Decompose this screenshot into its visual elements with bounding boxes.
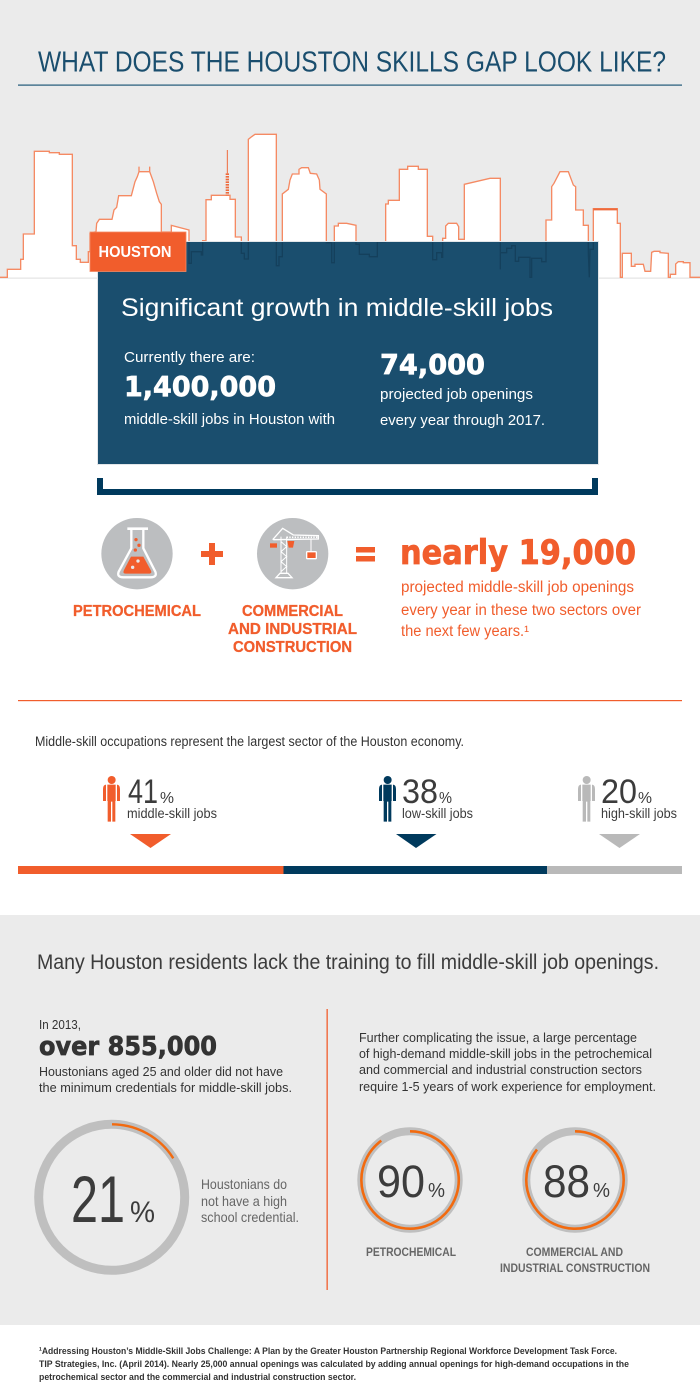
panel heading: Significant growth in middle-skill jobs <box>121 294 553 322</box>
stat: 20% high-skill jobs: 20 <box>601 773 637 811</box>
current jobs figure: middle-skill jobs in Houston with <box>124 411 335 428</box>
donut chart: 88% <box>526 1131 624 1229</box>
icon: gray person <box>578 776 595 822</box>
stat: 41% middle-skill jobs <box>103 773 217 848</box>
text: high school credential: Houstonians do <box>201 1176 287 1192</box>
footnote: TIP Strategies, Inc. (April 2014). Nearly 25,000 annual openings was calculated by adding annual openings for high-demand occupations in the <box>39 1359 629 1370</box>
label: commercial and industrial construction: COMMERCIAL <box>242 603 343 620</box>
callout: nearly 19,000: the next few years.¹ <box>401 623 529 640</box>
donut chart: 21%: % <box>130 1196 155 1229</box>
stat: 20% high-skill jobs <box>578 773 677 848</box>
plus sign <box>201 543 223 565</box>
label: petrochemical: PETROCHEMICAL <box>366 1247 456 1259</box>
donut chart: 90% <box>361 1131 459 1229</box>
text: over 855,000: over 855,000 <box>39 1032 217 1062</box>
bracket <box>100 478 595 492</box>
label: Houston <box>90 232 186 272</box>
equals sign <box>356 547 375 562</box>
text: work experience: of high-demand middle-skill jobs in the petrochemical <box>359 1046 652 1061</box>
text: work experience: require 1-5 years of work experience for employment. <box>359 1079 656 1094</box>
icon: orange person <box>103 776 120 822</box>
text: over 855,000: the minimum credentials for middle-skill jobs. <box>39 1080 292 1095</box>
callout: nearly 19,000: every year in these two sectors over <box>401 602 641 619</box>
label: commercial and industrial construction: AND INDUSTRIAL <box>228 621 357 638</box>
stat: 41% middle-skill jobs: middle-skill jobs <box>127 806 217 821</box>
current jobs figure <box>124 349 335 428</box>
stacked bar chart <box>18 866 682 874</box>
arrow: gray <box>599 834 640 848</box>
text: occupations intro: Middle-skill occupations represent the largest sector of the Houston economy. <box>35 734 464 749</box>
arrow: orange <box>130 834 171 848</box>
label: Houston: HOUSTON <box>98 244 172 261</box>
donut chart: 21%: 21 <box>71 1162 125 1236</box>
callout: nearly 19,000: nearly 19,000 <box>400 533 636 573</box>
label: commercial and industrial construction: INDUSTRIAL CONSTRUCTION <box>500 1263 650 1275</box>
stat: 38% low-skill jobs: % <box>439 790 452 807</box>
label: commercial and industrial construction <box>228 603 357 656</box>
donut chart: 88%: % <box>593 1180 610 1202</box>
projected openings figure: projected job openings <box>380 386 533 403</box>
text: work experience: Further complicating the issue, a large percentage <box>359 1030 637 1045</box>
stat: 38% low-skill jobs <box>379 773 473 848</box>
projected openings figure <box>380 348 545 429</box>
text: high school credential: not have a high <box>201 1193 287 1209</box>
donut chart: 21% <box>39 1124 185 1270</box>
skyline illustration <box>0 134 700 277</box>
icon: flask <box>101 518 173 589</box>
text: over 855,000 <box>39 1017 292 1095</box>
text: work experience: and commercial and industrial construction sectors <box>359 1062 642 1077</box>
text: over 855,000: In 2013, <box>39 1017 81 1032</box>
arrow: navy <box>396 834 436 848</box>
text: high school credential: school credential. <box>201 1209 299 1225</box>
callout: nearly 19,000 <box>400 533 641 640</box>
panel: training gap <box>0 915 700 1325</box>
label: petrochemical: PETROCHEMICAL <box>73 603 201 620</box>
donut chart: 90%: 90 <box>377 1156 425 1207</box>
text: work experience <box>359 1030 656 1094</box>
footnote: ¹Addressing Houston’s Middle-Skill Jobs Challenge: A Plan by the Greater Houston Partnership Regional Workforce Development Task Force. <box>39 1346 617 1357</box>
donut chart: 90%: % <box>428 1180 445 1202</box>
stat: 41% middle-skill jobs: % <box>160 790 174 807</box>
text: over 855,000: Houstonians aged 25 and older did not have <box>39 1064 283 1079</box>
current jobs figure: Currently there are: <box>124 349 255 366</box>
stat: 38% low-skill jobs: 38 <box>402 773 438 811</box>
section heading: Many Houston residents lack the training to fill middle-skill job openings. <box>37 951 659 974</box>
label: commercial and industrial construction: COMMERCIAL AND <box>526 1247 623 1259</box>
stat: 20% high-skill jobs: % <box>638 790 652 807</box>
projected openings figure: 74,000 <box>380 348 485 381</box>
stat: 38% low-skill jobs: low-skill jobs <box>402 806 473 821</box>
stat: 41% middle-skill jobs: 41 <box>128 773 158 811</box>
callout: nearly 19,000: projected middle-skill job openings <box>401 579 634 596</box>
stat: 20% high-skill jobs: high-skill jobs <box>601 806 677 821</box>
current jobs figure: 1,400,000 <box>124 370 276 403</box>
icon: navy person <box>379 776 396 822</box>
label: commercial and industrial construction <box>500 1247 650 1275</box>
label: commercial and industrial construction: CONSTRUCTION <box>233 639 352 656</box>
donut chart: 88%: 88 <box>543 1156 590 1207</box>
panel: significant growth <box>97 241 599 465</box>
text: high school credential <box>201 1176 299 1225</box>
icon: crane <box>257 518 328 589</box>
projected openings figure: every year through 2017. <box>380 412 545 429</box>
footnote <box>39 1346 629 1382</box>
